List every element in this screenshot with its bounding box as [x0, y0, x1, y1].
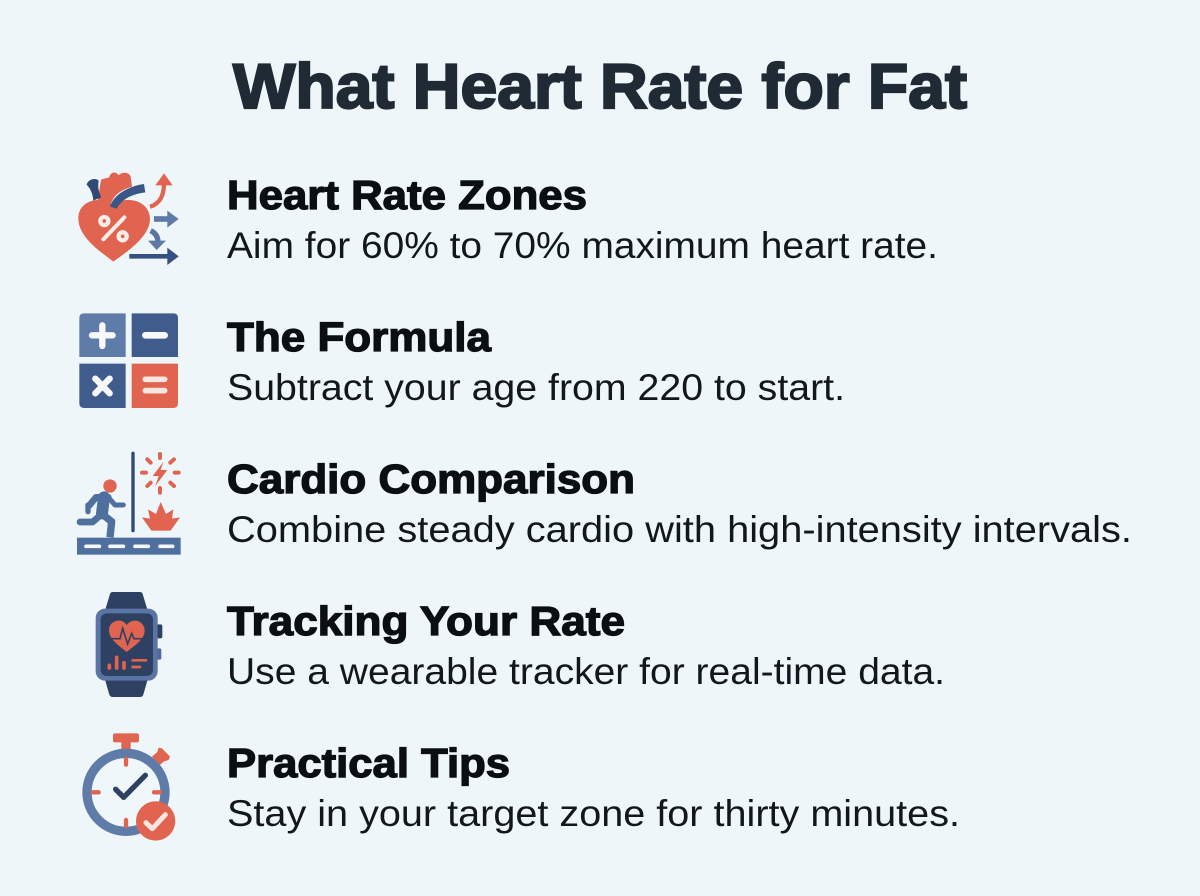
text block: cardio comparison: Combine steady cardio with high-intensity intervals. [227, 509, 1132, 550]
text block: cardio comparison: Cardio Comparison [227, 456, 635, 502]
text block: heart rate zones: Aim for 60% to 70% maximum heart rate. [227, 225, 938, 266]
text block: cardio comparison [227, 456, 1132, 550]
text block: tracking your rate: Tracking Your Rate [227, 598, 625, 644]
text block: heart rate zones [227, 172, 938, 266]
text block: the formula: The Formula [227, 314, 492, 360]
icon: calculator keys [79, 313, 178, 408]
icon: smartwatch with heart [96, 592, 162, 697]
text block: practical tips: Practical Tips [227, 740, 510, 786]
text block: the formula [227, 314, 845, 408]
text block: practical tips [227, 740, 960, 834]
text block: practical tips: Stay in your target zone for thirty minutes. [227, 793, 960, 834]
title: What Heart Rate for Fat [233, 52, 967, 122]
icon: runner, divider, burst and flame [77, 453, 181, 555]
text block: the formula: Subtract your age from 220 to start. [227, 367, 845, 408]
text block: tracking your rate [227, 598, 945, 692]
text block: tracking your rate: Use a wearable tracker for real-time data. [227, 651, 945, 692]
icon: stopwatch with check badge [87, 733, 175, 841]
icon: heart with percent and arrows [78, 172, 179, 265]
text block: heart rate zones: Heart Rate Zones [227, 172, 587, 218]
